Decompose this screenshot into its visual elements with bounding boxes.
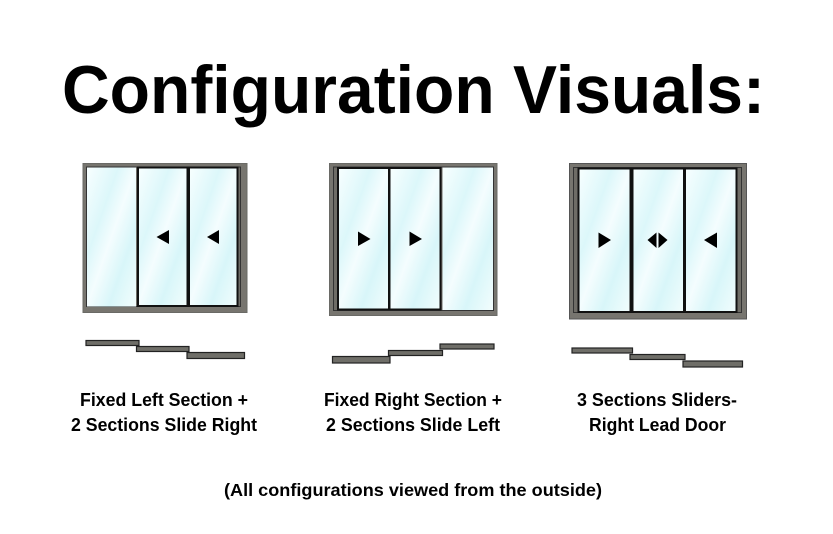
fixed glass: [87, 168, 136, 306]
caption: fixed right: [324, 390, 502, 435]
caption: fixed right: 2 Sections Slide Left: [326, 415, 500, 435]
sliding glass 2: [189, 168, 238, 306]
arrow left: [704, 232, 717, 248]
track diagram: fixed right: [332, 344, 494, 363]
footnote: (All configurations viewed from the outside): [224, 480, 602, 500]
panel: three section door: [570, 164, 746, 319]
arrow left: [207, 230, 219, 244]
double arrow: [648, 232, 668, 248]
glass right: [685, 168, 736, 312]
arrow right: [358, 232, 370, 246]
sliding glass 1: [138, 168, 188, 306]
arrow right: [410, 232, 422, 246]
door frame: [570, 164, 746, 319]
arrow left: [156, 230, 169, 244]
arrow right: [598, 232, 611, 248]
fixed glass: [442, 168, 493, 310]
caption: three section: 3 Sections Sliders-: [577, 390, 737, 410]
caption: three section: [577, 390, 737, 435]
caption: fixed left: 2 Sections Slide Right: [71, 415, 257, 435]
panel: fixed left door: [83, 164, 247, 312]
caption: fixed right: Fixed Right Section +: [324, 390, 502, 410]
glass left: [578, 168, 630, 312]
panel: fixed right door: [330, 164, 497, 316]
glass center: [632, 168, 684, 312]
door frame: [83, 164, 247, 312]
caption: fixed left: [71, 390, 257, 435]
track diagram: three section: [572, 348, 742, 367]
sliding glass 1: [338, 168, 389, 310]
title: Configuration Visuals:: [62, 52, 765, 128]
sliding glass 2: [390, 168, 440, 310]
track diagram: fixed left: [86, 340, 244, 358]
caption: three section: Right Lead Door: [589, 415, 726, 435]
door frame: [330, 164, 497, 316]
caption: fixed left: Fixed Left Section +: [80, 390, 248, 410]
